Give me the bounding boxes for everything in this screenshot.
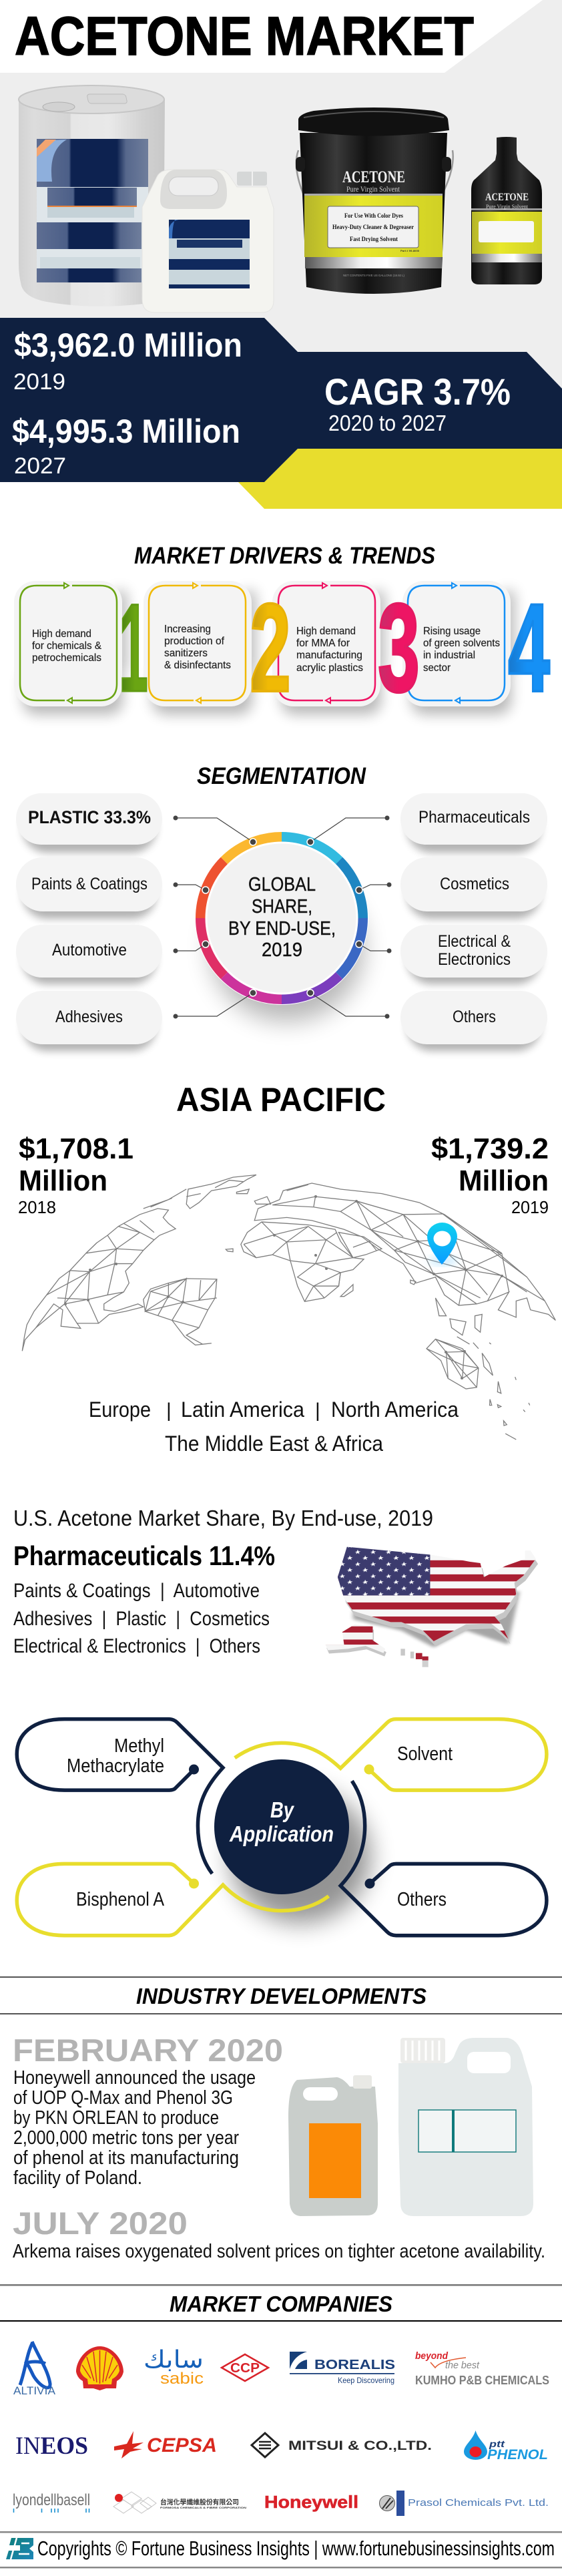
heading: segmentation: SEGMENTATION — [197, 763, 366, 789]
card 2: & disinfectants — [164, 660, 231, 671]
pill labels: Pharmaceuticals — [418, 808, 530, 827]
US market share text: Paints & Coatings | Automotive — [13, 1580, 260, 1602]
pill labels: Cosmetics — [440, 875, 509, 893]
logo: Shell — [76, 2346, 123, 2390]
other regions list: North America — [331, 1398, 459, 1422]
US market share text: Adhesives | Plastic | Cosmetics — [13, 1608, 270, 1630]
regional stat: 2018: $1,708.1 — [19, 1132, 133, 1165]
card 3: for MMA for — [296, 638, 350, 649]
US market share text: Pharmaceuticals 11.4% — [13, 1540, 275, 1571]
other regions list: The Middle East & Africa — [165, 1432, 383, 1456]
heading: asia pacific: ASIA PACIFIC — [176, 1081, 386, 1118]
logo: Mitsui: MITSUI & CO.,LTD. — [288, 2439, 432, 2453]
centre label: By — [270, 1797, 294, 1822]
pill labels: Automotive — [52, 941, 127, 959]
other regions list: Europe — [89, 1398, 151, 1422]
leader lines — [176, 818, 389, 1016]
logo: Borealis — [290, 2352, 395, 2385]
logo: Altivia: ALTIVIA — [13, 2384, 56, 2397]
US market share text: Electrical & Electronics | Others — [13, 1635, 260, 1657]
Alaska — [326, 1625, 386, 1657]
US flag map — [322, 1544, 541, 1667]
regional stat: 2019: 2019 — [511, 1197, 549, 1217]
frame labels — [67, 1735, 453, 1910]
logo: Prasol: Prasol Chemicals Pvt. Ltd. — [408, 2497, 549, 2509]
logo: Altivia — [13, 2342, 56, 2397]
frame labels: Bisphenol A — [76, 1889, 165, 1910]
card 1: High demand — [32, 628, 91, 640]
product: black acetone bottle: Pure Virgin Solvent — [486, 204, 529, 210]
logo: SABIC: sabic — [160, 2370, 204, 2388]
centre shadow — [230, 1789, 370, 1923]
panel: market drivers cards: 1 — [119, 578, 148, 718]
footer logo — [6, 2538, 33, 2559]
US market share text: U.S. Acetone Market Share, By End-use, 2019 — [13, 1506, 433, 1530]
logo: Prasol — [379, 2491, 549, 2516]
donut label: GLOBAL — [248, 874, 316, 895]
title: ACETONE MARKET — [15, 6, 474, 67]
card 1: for chemicals & — [32, 640, 101, 652]
frame labels: Solvent — [397, 1743, 453, 1765]
product: white jug — [142, 170, 274, 312]
regional stat: 2019: $1,739.2 — [431, 1132, 549, 1165]
logo: CCP: CCP — [230, 2361, 260, 2376]
panel: segmentation — [16, 793, 547, 1051]
CAGR: CAGR 3.7% — [324, 371, 511, 413]
frame labels: Methacrylate — [67, 1755, 164, 1777]
centre label — [229, 1797, 334, 1846]
heading: industry developments: INDUSTRY DEVELOPMENTS — [136, 1984, 427, 2008]
product: small grey jug — [288, 2075, 378, 2216]
yellow accent band — [238, 449, 562, 509]
regional stat: 2019: Million — [459, 1164, 549, 1197]
CAGR: 2020 to 2027 — [328, 411, 447, 435]
donut ring — [168, 804, 396, 1032]
card 2: Increasing — [164, 624, 211, 635]
logo: Kumho P&B: KUMHO P&B CHEMICALS — [415, 2374, 549, 2387]
product: black acetone pail: NET CONTENTS FIVE US GALLONS (18.92 L) — [343, 274, 404, 277]
other regions list: | — [166, 1400, 172, 1422]
other regions list — [89, 1398, 459, 1456]
frame dots — [189, 1764, 375, 1888]
development: July 2020: JULY 2020 — [13, 2205, 188, 2241]
product: black acetone pail: Heavy-Duty Cleaner & Degreaser — [332, 224, 414, 230]
product: black acetone pail: ACETONE — [342, 168, 405, 186]
logo: Honeywell: Honeywell — [264, 2492, 358, 2512]
development: February 2020: of UOP Q-Max and Phenol 3G — [13, 2087, 233, 2109]
leader dots — [174, 816, 391, 1019]
CAGR — [324, 371, 511, 435]
number 3: 3 — [378, 578, 420, 718]
regional stat: 2018: 2018 — [18, 1197, 56, 1217]
product: black acetone pail: Fast Drying Solvent — [350, 236, 398, 242]
grey header backdrop — [0, 0, 562, 401]
logo: Kumho P&B: beyond — [415, 2350, 449, 2362]
logo: Kumho P&B — [415, 2350, 549, 2387]
centre circle — [214, 1759, 349, 1894]
card 4: in industrial — [423, 650, 475, 661]
logo: LyondellBasell: lyondellbasell — [13, 2491, 90, 2509]
world map — [22, 1175, 555, 1440]
pill labels: Others — [453, 1008, 496, 1026]
logo: Borealis: Keep Discovering — [338, 2376, 394, 2385]
product: black acetone pail: For Use With Color Dyes — [344, 212, 403, 219]
logo: Mitsui — [252, 2433, 432, 2457]
pill labels: Electrical & — [438, 932, 511, 951]
Hawaii — [400, 1649, 429, 1667]
card 3: High demand — [296, 626, 356, 637]
other regions list: | — [315, 1400, 320, 1422]
development: February 2020: by PKN ORLEAN to produce — [13, 2107, 219, 2129]
right pills — [400, 793, 547, 1044]
logo: Formosa: FORMOSA CHEMICALS & FIBRE CORPORATION — [160, 2506, 246, 2509]
regional stat: 2018: Million — [19, 1164, 107, 1197]
card 2: sanitizers — [164, 648, 208, 659]
donut label: 2019 — [262, 939, 302, 961]
logo: Formosa — [113, 2492, 246, 2513]
card 4: sector — [423, 662, 451, 674]
logo: CEPSA: CEPSA — [147, 2434, 217, 2456]
card 4: of green solvents — [423, 638, 500, 649]
product: black acetone bottle: ACETONE — [485, 192, 529, 203]
map pin — [427, 1223, 458, 1265]
card 2: production of — [164, 636, 225, 647]
logo: SABIC: سابك — [144, 2346, 204, 2373]
logo: PTT Phenol: ptt — [489, 2438, 506, 2449]
heading: market companies: MARKET COMPANIES — [170, 2292, 392, 2316]
product: large white jug — [398, 2038, 533, 2216]
panel: market drivers cards — [14, 578, 550, 718]
pill labels: Adhesives — [55, 1008, 123, 1026]
development: February 2020: of phenol at its manufacturing — [13, 2147, 239, 2169]
stat 2027: 2027 — [14, 453, 66, 479]
pill labels: Electronics — [438, 950, 511, 969]
development: July 2020 — [13, 2205, 545, 2262]
number 2: 2 — [250, 578, 291, 718]
frame labels: Methyl — [114, 1735, 164, 1757]
US market share text — [13, 1506, 433, 1657]
stat 2019: $3,962.0 Million — [14, 327, 242, 364]
stat 2027: $4,995.3 Million — [12, 413, 240, 450]
map nodes — [64, 1195, 503, 1379]
product: black acetone pail: Part # 99-8000 — [400, 249, 420, 252]
product: black acetone bottle — [471, 137, 542, 284]
left pills — [16, 793, 162, 1044]
card 4: Rising usage — [423, 626, 481, 637]
donut label: BY END-USE, — [228, 918, 336, 939]
card 2 — [144, 581, 252, 706]
pill labels: PLASTIC 33.3% — [28, 807, 151, 827]
development: February 2020: FEBRUARY 2020 — [13, 2032, 283, 2068]
donut label — [228, 874, 336, 961]
logo: INEOS: INEOS — [15, 2432, 88, 2460]
regional stat: 2018 — [18, 1132, 133, 1217]
logo: Kumho P&B: the best — [445, 2360, 480, 2371]
development: February 2020 — [13, 2032, 283, 2189]
development: February 2020: 2,000,000 metric tons per year — [13, 2127, 239, 2149]
logo: SABIC — [144, 2346, 204, 2388]
product: black acetone pail: Pure Virgin Solvent — [346, 184, 400, 194]
regional stat: 2019 — [431, 1132, 549, 1217]
card 3: manufacturing — [296, 650, 362, 661]
development: February 2020: Honeywell announced the usage — [13, 2067, 256, 2089]
logo: CCP — [222, 2354, 268, 2381]
logo: Borealis: BOREALIS — [314, 2358, 395, 2372]
stat 2019: 2019 — [13, 369, 65, 395]
navy stats banner — [0, 318, 562, 482]
centre label: Application — [229, 1821, 334, 1846]
heading: market drivers: MARKET DRIVERS & TRENDS — [134, 543, 435, 569]
logo: PTT Phenol: PHENOL — [487, 2447, 548, 2462]
panel: by application — [17, 1719, 547, 1936]
product: black acetone pail — [296, 108, 453, 294]
other regions list: Latin America — [181, 1398, 304, 1422]
card 3: acrylic plastics — [296, 662, 363, 674]
frames — [17, 1719, 547, 1936]
footer — [0, 2531, 562, 2568]
product: grey drum — [19, 85, 165, 306]
pill labels: Paints & Coatings — [31, 875, 148, 893]
logo: Formosa: 台灣化學纖維股份有限公司 — [160, 2498, 239, 2507]
donut label: SHARE, — [252, 896, 312, 917]
stat 2019 — [13, 327, 242, 395]
pill labels — [28, 807, 530, 1026]
donut shadow — [210, 875, 364, 1022]
card 1: petrochemicals — [32, 652, 101, 664]
card 4 — [402, 581, 511, 706]
card 3 — [272, 581, 380, 706]
development: February 2020: facility of Poland. — [13, 2167, 142, 2189]
logo: PTT Phenol — [464, 2430, 548, 2462]
card 1 — [14, 581, 122, 706]
logo: CEPSA — [114, 2431, 217, 2458]
stat 2027 — [12, 413, 240, 479]
frame labels: Others — [397, 1889, 447, 1910]
